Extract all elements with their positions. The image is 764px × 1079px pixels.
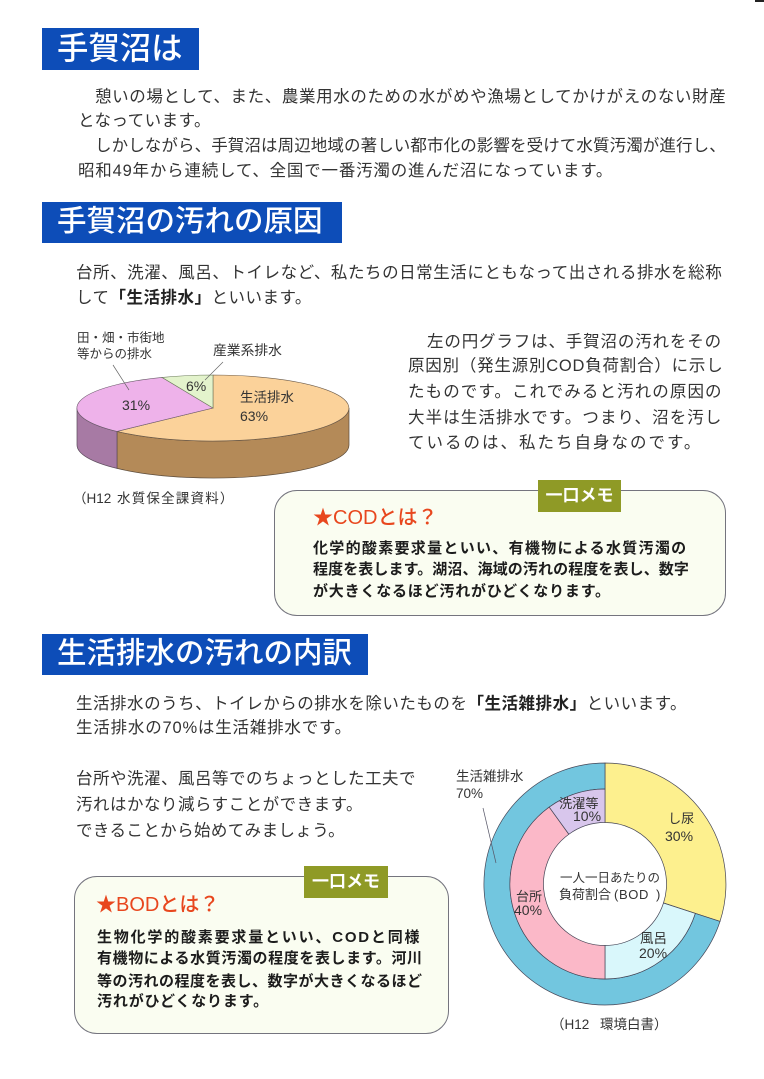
text block: pie chart explanation: 左の円グラフは、手賀沼の汚れをその bbox=[427, 333, 722, 351]
donut labels: し尿 bbox=[668, 811, 694, 826]
text block: introduction: しかしながら、手賀沼は周辺地域の著しい都市化の影響を受けて水質汚濁が進行し、 bbox=[95, 137, 726, 155]
text block: breakdown description bbox=[76, 694, 687, 737]
memo title: ★BODとは？ bbox=[96, 894, 219, 916]
donut labels: 負荷割合 bbox=[559, 887, 611, 902]
donut segment: night soil 30% bbox=[605, 763, 726, 921]
donut labels: 10% bbox=[573, 808, 601, 824]
text block: introduction: 昭和49年から連続して、全国で一番汚濁の進んだ沼になっています。 bbox=[78, 162, 613, 180]
memo text: 程度を表します。湖沼、海域の汚れの程度を表し、数字 bbox=[313, 561, 689, 578]
memo tag bbox=[304, 866, 388, 898]
text block: cause description bbox=[76, 264, 722, 307]
pie labels: 6% bbox=[186, 378, 206, 394]
pie labels: 63% bbox=[240, 408, 268, 424]
memo text: 等の汚れの程度を表し、数字が大きくなるほど bbox=[97, 973, 423, 990]
heading: 手賀沼は: 手賀沼は bbox=[57, 31, 183, 66]
memo tag: 一口メモ bbox=[546, 486, 614, 505]
donut labels bbox=[456, 769, 694, 1032]
text block: pie chart explanation: 大半は生活排水です。つまり、沼を汚し bbox=[408, 409, 722, 427]
text block: breakdown description: 生活排水の70%は生活雑排水です。 bbox=[76, 719, 352, 737]
pie slice side: fields bbox=[77, 408, 117, 468]
text block: introduction bbox=[78, 88, 726, 180]
decorative corner mark bbox=[755, 0, 764, 2]
donut labels: 70% bbox=[456, 786, 483, 801]
donut labels: 台所 bbox=[516, 889, 542, 904]
donut labels: ) bbox=[656, 887, 660, 902]
text block: advice: 汚れはかなり減らすことができます。 bbox=[76, 796, 363, 814]
pie labels: 31% bbox=[122, 397, 150, 413]
memo text bbox=[313, 540, 689, 600]
memo text: 生物化学的酸素要求量といい、CODと同様 bbox=[97, 929, 421, 946]
donut labels: （H12 bbox=[551, 1017, 589, 1032]
donut labels: 一人一日あたりの bbox=[560, 871, 660, 885]
panel: COD memo bbox=[274, 490, 726, 616]
leader line bbox=[483, 808, 496, 863]
pie labels bbox=[73, 331, 294, 506]
pie labels: 等からの排水 bbox=[77, 346, 153, 361]
text block: cause description: して「生活排水」といいます。 bbox=[76, 289, 312, 307]
donut labels: 洗濯等 bbox=[559, 795, 599, 811]
donut segment: kitchen 40% bbox=[510, 807, 605, 979]
pie labels: （H12 bbox=[73, 491, 111, 506]
donut labels: 40% bbox=[514, 902, 542, 918]
heading: 生活排水の汚れの内訳: 生活排水の汚れの内訳 bbox=[57, 637, 352, 670]
leader lines bbox=[113, 362, 223, 390]
text block: cause description: 台所、洗濯、風呂、トイレなど、私たちの日常生活にともなって出される排水を総称 bbox=[76, 264, 722, 282]
donut labels: 30% bbox=[665, 828, 693, 844]
text block: introduction: 憩いの場として、また、農業用水のための水がめや漁場としてかけがえのない財産 bbox=[95, 88, 726, 106]
pie labels: 水質保全課資料） bbox=[117, 491, 235, 506]
heading: 手賀沼は bbox=[42, 28, 199, 70]
memo text: 汚れがひどくなります。 bbox=[97, 993, 269, 1010]
memo text: が大きくなるほど汚れがひどくなります。 bbox=[313, 583, 611, 600]
memo tag bbox=[538, 480, 621, 512]
donut labels: ( bbox=[614, 887, 619, 902]
donut segment: laundry 10% bbox=[549, 789, 605, 834]
pie labels: 産業系排水 bbox=[213, 343, 282, 358]
donut labels: 環境白書） bbox=[600, 1017, 668, 1032]
text block: advice: できることから始めてみましょう。 bbox=[76, 822, 345, 840]
donut segment: bath 20% bbox=[605, 903, 695, 979]
pie slice side: household bbox=[117, 408, 349, 478]
donut labels: BOD bbox=[619, 887, 649, 902]
memo title: ★CODとは？ bbox=[313, 507, 437, 529]
donut labels: 生活雑排水 bbox=[456, 769, 524, 784]
text block: pie chart explanation bbox=[408, 332, 724, 452]
text block: advice bbox=[76, 770, 416, 840]
pie labels: 生活排水 bbox=[240, 390, 294, 405]
text block: pie chart explanation: ているのは、私たち自身なのです。 bbox=[408, 434, 702, 452]
pie slice: fields 31% bbox=[77, 377, 213, 431]
memo text: 有機物による水質汚濁の程度を表します。河川 bbox=[97, 950, 423, 967]
text block: pie chart explanation: たものです。これでみると汚れの原因の bbox=[408, 383, 723, 401]
text block: introduction: となっています。 bbox=[78, 112, 211, 130]
text block: pie chart explanation: 原因別（発生源別COD負荷割合）に示し bbox=[408, 357, 724, 375]
memo text: 化学的酸素要求量といい、有機物による水質汚濁の bbox=[313, 540, 687, 557]
donut labels: 風呂 bbox=[640, 931, 667, 946]
pie slice: industry 6% bbox=[162, 375, 213, 408]
memo tag: 一口メモ bbox=[312, 872, 380, 891]
pie slice: household 63% bbox=[117, 375, 349, 441]
memo text bbox=[97, 929, 423, 1010]
text block: breakdown description: 生活排水のうち、トイレからの排水を除いたものを「生活雑排水」といいます。 bbox=[76, 695, 687, 713]
pie labels: 田・畑・市街地 bbox=[77, 331, 165, 345]
donut labels: 20% bbox=[639, 945, 667, 961]
text block: advice: 台所や洗濯、風呂等でのちょっとした工夫で bbox=[76, 770, 416, 788]
heading: 手賀沼の汚れの原因: 手賀沼の汚れの原因 bbox=[57, 205, 323, 238]
panel: BOD memo bbox=[74, 876, 449, 1034]
donut segment: gray water 70% bbox=[484, 763, 720, 1005]
